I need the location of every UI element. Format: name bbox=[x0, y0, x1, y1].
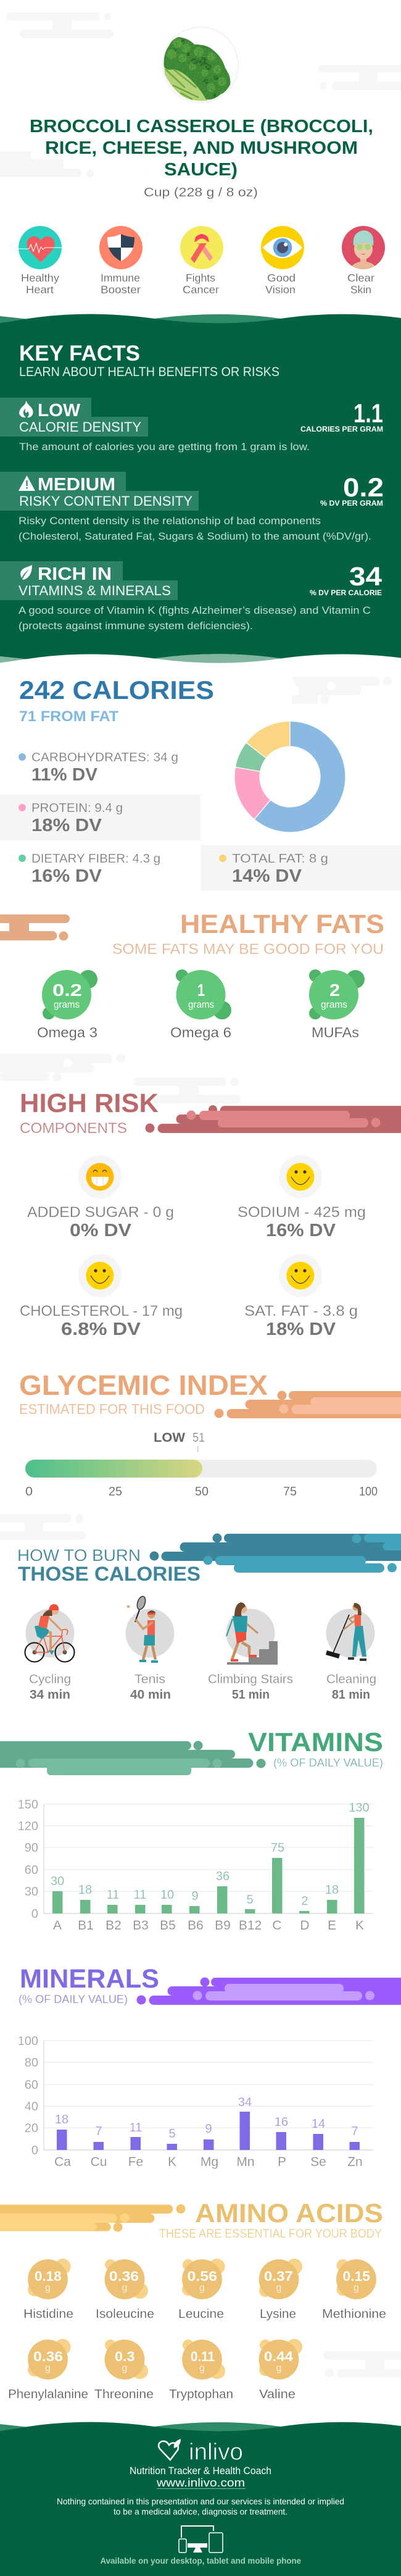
heading: how to burn: HOW TO BURN bbox=[17, 1546, 141, 1565]
fat: mufas: 2 bbox=[329, 981, 340, 1000]
x axis labels: B9 bbox=[215, 1918, 231, 1933]
activity: cleaning: Cleaning bbox=[326, 1673, 376, 1686]
decorative blob bbox=[149, 1534, 401, 1573]
value labels: 10 bbox=[160, 1888, 174, 1902]
decorative blob bbox=[0, 2204, 185, 2231]
decorative blob bbox=[0, 914, 70, 941]
activity: cycling bbox=[25, 1604, 74, 1702]
panel: key facts bbox=[0, 314, 401, 663]
heading: high risk bbox=[20, 1089, 159, 1137]
panel: high risk components bbox=[20, 1089, 401, 1339]
amino: methionine: Methionine bbox=[322, 2307, 386, 2321]
risk: added sugar bbox=[27, 1155, 174, 1240]
y axis labels: 60 bbox=[25, 1863, 38, 1877]
panel: amino acids bbox=[0, 2199, 386, 2401]
serving size: Cup (228 g / 8 oz) bbox=[144, 186, 258, 199]
amino: phenylalanine: Phenylalanine bbox=[8, 2388, 88, 2401]
x axis labels: B12 bbox=[239, 1918, 262, 1933]
x axis labels: P bbox=[278, 2155, 286, 2169]
heading: calories: 242 CALORIES bbox=[19, 675, 214, 705]
panel: calories bbox=[0, 675, 401, 891]
x axis labels: B1 bbox=[78, 1918, 94, 1933]
value labels: 30 bbox=[51, 1875, 64, 1888]
icon: healthy heart bbox=[19, 226, 62, 269]
macro: carbohydrates: 11% DV bbox=[31, 765, 98, 785]
x axis labels: A bbox=[53, 1918, 62, 1933]
heading: vitamins: (% OF DAILY VALUE) bbox=[273, 1756, 383, 1769]
fact: rich in vitamins and minerals: 34 bbox=[349, 562, 382, 592]
x axis labels: Mn bbox=[236, 2155, 255, 2169]
fact: medium risky content density: % DV PER GRAM bbox=[320, 499, 383, 508]
amino: valine bbox=[259, 2339, 302, 2401]
amino: isoleucine bbox=[96, 2259, 154, 2321]
macro: protein: 18% DV bbox=[31, 816, 102, 835]
heading: minerals: (% OF DAILY VALUE) bbox=[19, 1993, 128, 2005]
macro: protein bbox=[0, 795, 200, 840]
donut chart: macronutrients bbox=[234, 721, 345, 832]
fact: rich in vitamins and minerals: VITAMINS & MINERALS bbox=[19, 583, 171, 598]
amino: methionine bbox=[322, 2259, 386, 2321]
fact: rich in vitamins and minerals: RICH IN bbox=[38, 564, 112, 584]
amino: lysine bbox=[259, 2259, 302, 2321]
fact: medium risky content density: Risky Content density is the relationship of bad components bbox=[19, 516, 321, 527]
risk: sodium: 16% DV bbox=[266, 1221, 336, 1240]
macro: dietary fiber bbox=[19, 852, 160, 886]
macro: total fat: 14% DV bbox=[232, 866, 302, 886]
label: good vision: Vision bbox=[265, 283, 296, 296]
x axis labels: Ca bbox=[54, 2155, 71, 2169]
value labels: 7 bbox=[95, 2125, 102, 2138]
fat: omega 3: grams bbox=[54, 1000, 80, 1010]
disclaimer: to be a medical advice, diagnosis or treatment. bbox=[114, 2507, 287, 2517]
fact: low calorie density bbox=[0, 398, 383, 453]
fat: omega 6: grams bbox=[188, 1000, 214, 1010]
macro: carbohydrates bbox=[19, 751, 178, 785]
activity: climbing stairs: 51 min bbox=[232, 1688, 270, 1702]
label: fights cancer: Fights bbox=[186, 272, 215, 284]
macro: total fat bbox=[200, 845, 401, 891]
tagline and website: Nutrition Tracker & Health Coach bbox=[130, 2465, 271, 2477]
amino: methionine: g bbox=[353, 2283, 359, 2293]
value labels: 9 bbox=[205, 2122, 212, 2136]
title bbox=[30, 117, 373, 180]
fact: medium risky content density bbox=[0, 472, 384, 542]
value labels: 9 bbox=[191, 1889, 199, 1903]
fact: medium risky content density: MEDIUM bbox=[38, 475, 115, 495]
gauge scale bbox=[25, 1485, 378, 1499]
heading: amino acids: THESE ARE ESSENTIAL FOR YOUR BODY bbox=[159, 2227, 382, 2241]
y axis labels: 0 bbox=[31, 2144, 38, 2157]
icon: person sweeping bbox=[326, 1603, 366, 1661]
label: clear skin: Skin bbox=[350, 283, 371, 296]
hero food image: broccoli bbox=[163, 27, 238, 102]
gauge scale: 75 bbox=[283, 1485, 297, 1499]
heading: how to burn: THOSE CALORIES bbox=[18, 1563, 200, 1585]
value labels bbox=[55, 2096, 358, 2141]
icon: clear skin face bbox=[342, 226, 385, 269]
title: RICE, CHEESE, AND MUSHROOM bbox=[45, 138, 358, 158]
heading: key facts: KEY FACTS bbox=[19, 341, 140, 366]
x axis labels bbox=[53, 1918, 364, 1933]
icon: warning triangle bbox=[19, 475, 35, 491]
amino: histidine: g bbox=[45, 2283, 51, 2293]
icon: person climbing stairs bbox=[226, 1602, 278, 1665]
value labels: 130 bbox=[349, 1801, 370, 1815]
x axis labels: B6 bbox=[188, 1918, 204, 1933]
gauge scale: 25 bbox=[109, 1485, 122, 1499]
decorative faint blob: behind high risk bbox=[133, 1077, 241, 1103]
fat: omega 3: Omega 3 bbox=[37, 1024, 97, 1040]
disclaimer bbox=[57, 2496, 344, 2517]
fact: medium risky content density: (Cholesterol, Saturated Fat, Sugars & Sodium) to the amount (%DV/gr). bbox=[19, 531, 371, 542]
amino: leucine: Leucine bbox=[178, 2307, 224, 2321]
amino: histidine: Histidine bbox=[23, 2307, 73, 2321]
heading: glycemic index bbox=[19, 1370, 268, 1417]
heading: vitamins: VITAMINS bbox=[248, 1728, 383, 1757]
risk: cholesterol: CHOLESTEROL - 17 mg bbox=[20, 1303, 183, 1319]
amino: threonine bbox=[94, 2340, 154, 2401]
risk: added sugar: 0% DV bbox=[70, 1221, 132, 1240]
decorative blob bbox=[146, 1105, 401, 1133]
icon: leaf bbox=[20, 565, 32, 580]
amino: phenylalanine: g bbox=[45, 2363, 51, 2373]
value labels: 11 bbox=[134, 1888, 146, 1902]
y axis labels: 90 bbox=[25, 1841, 38, 1855]
value labels: 18 bbox=[325, 1883, 339, 1897]
activity: cycling: 34 min bbox=[30, 1688, 70, 1702]
bar chart: vitamins bbox=[18, 1798, 373, 1933]
fat: omega 6: 1 bbox=[197, 981, 205, 1000]
fact: low calorie density: LOW bbox=[38, 401, 81, 420]
label: healthy heart: Healthy bbox=[21, 272, 59, 284]
x axis labels: C bbox=[272, 1918, 282, 1933]
value labels: 16 bbox=[275, 2115, 288, 2129]
activity: cleaning: 81 min bbox=[332, 1688, 370, 1702]
macro: carbohydrates: CARBOHYDRATES: 34 g bbox=[31, 751, 178, 764]
value labels: 2 bbox=[301, 1894, 308, 1908]
amino: histidine bbox=[23, 2259, 73, 2321]
icon: smiling face bbox=[286, 1262, 315, 1289]
activity: tennis: Tenis bbox=[134, 1673, 165, 1686]
label: clear skin: Clear bbox=[347, 272, 374, 284]
fat: omega 6: Omega 6 bbox=[170, 1024, 231, 1040]
icon: immune booster bbox=[99, 226, 143, 269]
amino: lysine: Lysine bbox=[260, 2307, 296, 2321]
heading: high risk: HIGH RISK bbox=[20, 1089, 159, 1118]
value labels: 11 bbox=[130, 2121, 142, 2135]
activity: tennis: 40 min bbox=[130, 1688, 171, 1702]
risk: saturated fat: SAT. FAT - 3.8 g bbox=[244, 1303, 358, 1319]
amino: tryptophan: g bbox=[199, 2363, 205, 2373]
benefits row bbox=[19, 226, 385, 296]
fact: low calorie density: CALORIES PER GRAM bbox=[300, 425, 383, 433]
panel: how to burn those calories bbox=[17, 1534, 401, 1702]
heading: how to burn bbox=[17, 1546, 200, 1585]
logo: inlivo: inlivo bbox=[189, 2439, 243, 2465]
risk: saturated fat: 18% DV bbox=[266, 1319, 336, 1339]
icon: tennis player bbox=[127, 1595, 158, 1663]
heading: minerals: MINERALS bbox=[20, 1964, 159, 1994]
tagline and website bbox=[130, 2465, 271, 2489]
fat: mufas: MUFAs bbox=[312, 1024, 359, 1040]
icon: smiling face bbox=[86, 1262, 114, 1289]
x axis labels: B5 bbox=[160, 1918, 176, 1933]
gauge scale: 100 bbox=[359, 1485, 378, 1499]
fat: omega 3: 0.2 bbox=[52, 981, 82, 1000]
fat: mufas bbox=[309, 969, 365, 1040]
y axis labels: 80 bbox=[25, 2056, 38, 2070]
x axis labels: Zn bbox=[347, 2155, 363, 2169]
fact: rich in vitamins and minerals: % DV PER CALORIE bbox=[310, 588, 382, 597]
panel: glycemic index bbox=[19, 1370, 401, 1499]
heading: calories bbox=[19, 675, 214, 725]
y axis labels: 100 bbox=[18, 2034, 38, 2048]
value labels: 36 bbox=[216, 1870, 229, 1883]
value labels: 34 bbox=[238, 2096, 252, 2109]
value labels: 75 bbox=[271, 1841, 284, 1855]
amino: leucine: g bbox=[199, 2283, 205, 2293]
title: BROCCOLI CASSEROLE (BROCCOLI, bbox=[30, 117, 373, 136]
x axis labels: B3 bbox=[133, 1918, 149, 1933]
decorative blob bbox=[0, 1741, 265, 1775]
amino: lysine: 0.37 bbox=[264, 2269, 293, 2284]
label: healthy heart: Heart bbox=[26, 283, 54, 296]
y axis labels: 30 bbox=[25, 1885, 38, 1899]
y axis labels bbox=[18, 1798, 38, 1921]
fact: medium risky content density: RISKY CONTENT DENSITY bbox=[19, 493, 192, 509]
label: healthy heart bbox=[21, 272, 59, 296]
decorative faint blob: top right bbox=[318, 65, 401, 90]
x axis labels: Se bbox=[310, 2155, 326, 2169]
heading: vitamins bbox=[248, 1728, 383, 1769]
activity: climbing stairs bbox=[208, 1602, 293, 1702]
y axis labels: 150 bbox=[18, 1798, 38, 1812]
y axis labels bbox=[18, 2034, 38, 2157]
amino: tryptophan: Tryptophan bbox=[169, 2388, 233, 2401]
fact: rich in vitamins and minerals: (protects against immune system deficiencies). bbox=[19, 621, 253, 632]
gauge value: low 51: 51 bbox=[192, 1431, 205, 1445]
fact: low calorie density: 1.1 bbox=[353, 399, 383, 429]
heading: healthy fats bbox=[112, 910, 384, 958]
label: immune booster: Immune bbox=[101, 272, 140, 284]
label: clear skin bbox=[347, 272, 374, 296]
x axis labels: D bbox=[300, 1918, 310, 1933]
label: fights cancer: Cancer bbox=[183, 283, 219, 296]
amino: histidine: 0.18 bbox=[35, 2269, 62, 2284]
y axis labels: 60 bbox=[25, 2078, 38, 2092]
label: immune booster bbox=[101, 272, 141, 296]
heading: healthy fats: SOME FATS MAY BE GOOD FOR YOU bbox=[112, 941, 384, 958]
value labels bbox=[51, 1801, 370, 1908]
icon: cyclist bbox=[25, 1604, 74, 1662]
amino: lysine: g bbox=[276, 2283, 281, 2293]
gauge scale: 50 bbox=[195, 1485, 209, 1499]
label: immune booster: Booster bbox=[101, 283, 141, 296]
fat: omega 6 bbox=[170, 969, 231, 1040]
amino: tryptophan: 0.11 bbox=[191, 2349, 215, 2364]
heading: key facts: LEARN ABOUT HEALTH BENEFITS OR RISKS bbox=[19, 365, 279, 379]
icon: devices bbox=[179, 2526, 223, 2553]
gauge bar bbox=[25, 1460, 377, 1478]
decorative faint blob: right of valine bbox=[323, 2351, 401, 2377]
decorative faint blob: before high risk bbox=[0, 1054, 125, 1081]
heading: calories: 71 FROM FAT bbox=[19, 708, 118, 725]
logo: inlivo bbox=[159, 2439, 243, 2465]
y axis labels: 0 bbox=[31, 1907, 38, 1921]
x axis labels: E bbox=[328, 1918, 336, 1933]
value labels: 5 bbox=[246, 1893, 254, 1907]
amino: threonine: g bbox=[122, 2363, 127, 2373]
value labels: 18 bbox=[55, 2113, 68, 2126]
label: good vision bbox=[265, 272, 296, 296]
heading: glycemic index: GLYCEMIC INDEX bbox=[19, 1370, 268, 1401]
amino: phenylalanine: 0.36 bbox=[33, 2349, 63, 2364]
amino: tryptophan bbox=[169, 2340, 233, 2401]
value labels: 14 bbox=[312, 2117, 325, 2131]
panel: footer bbox=[0, 2422, 401, 2576]
fat: omega 3 bbox=[37, 970, 97, 1040]
risk: saturated fat bbox=[244, 1254, 358, 1339]
bars bbox=[52, 1818, 364, 1913]
x axis labels: K bbox=[168, 2155, 176, 2169]
gauge value: low 51: LOW bbox=[154, 1431, 185, 1445]
amino: leucine bbox=[178, 2259, 225, 2321]
heading: amino acids: AMINO ACIDS bbox=[195, 2199, 383, 2228]
amino: valine: g bbox=[276, 2363, 281, 2373]
gauge scale: 0 bbox=[25, 1485, 33, 1499]
decorative blob bbox=[215, 1390, 401, 1418]
fact: low calorie density: CALORIE DENSITY bbox=[19, 419, 141, 435]
disclaimer: Nothing contained in this presentation and our services is intended or implied bbox=[57, 2496, 344, 2506]
macro: total fat: TOTAL FAT: 8 g bbox=[232, 852, 328, 866]
y axis labels: 40 bbox=[25, 2100, 38, 2114]
value labels: 5 bbox=[168, 2127, 176, 2141]
x axis labels: Mg bbox=[200, 2155, 218, 2169]
risk: sodium bbox=[238, 1155, 366, 1240]
label: good vision: Good bbox=[267, 272, 296, 284]
value labels: 7 bbox=[351, 2125, 358, 2138]
activity: cleaning bbox=[326, 1603, 376, 1702]
y axis labels: 120 bbox=[18, 1820, 38, 1833]
heading: glycemic index: ESTIMATED FOR THIS FOOD bbox=[19, 1401, 205, 1417]
decorative faint blob: calories bbox=[292, 677, 392, 704]
macro: dietary fiber: DIETARY FIBER: 4.3 g bbox=[31, 852, 160, 866]
fact: medium risky content density: 0.2 bbox=[343, 473, 384, 503]
icon: good vision eye bbox=[261, 226, 304, 269]
heading: key facts bbox=[19, 341, 279, 379]
fact: rich in vitamins and minerals: A good source of Vitamin K (fights Alzheimer’s disease) and Vitamin C bbox=[19, 605, 371, 616]
availability note: Available on your desktop, tablet and mobile phone bbox=[100, 2556, 301, 2566]
icon: flame bbox=[19, 401, 33, 417]
x axis labels: K bbox=[355, 1918, 364, 1933]
risk: cholesterol: 6.8% DV bbox=[61, 1319, 141, 1339]
x axis labels: Cu bbox=[91, 2155, 107, 2169]
panel: minerals bbox=[18, 1964, 401, 2169]
label: fights cancer bbox=[183, 272, 219, 296]
activity: tennis bbox=[126, 1595, 174, 1702]
amino: threonine: 0.3 bbox=[115, 2349, 134, 2364]
amino: methionine: 0.15 bbox=[343, 2269, 370, 2284]
amino: threonine: Threonine bbox=[94, 2388, 154, 2401]
heading: high risk: COMPONENTS bbox=[20, 1120, 127, 1137]
amino: isoleucine: Isoleucine bbox=[96, 2307, 154, 2321]
risk: cholesterol bbox=[20, 1254, 183, 1339]
decorative faint blob: top left bbox=[6, 12, 114, 38]
fact: rich in vitamins and minerals bbox=[0, 561, 382, 632]
fact: low calorie density: The amount of calories you are getting from 1 gram is low. bbox=[19, 441, 310, 453]
x axis labels: Fe bbox=[128, 2155, 143, 2169]
macro: protein: PROTEIN: 9.4 g bbox=[31, 801, 123, 815]
activity: cycling: Cycling bbox=[29, 1673, 71, 1686]
icon: smiling face bbox=[286, 1163, 315, 1190]
panel: healthy fats bbox=[0, 910, 384, 1040]
gauge value: low 51 bbox=[154, 1431, 205, 1452]
heading: amino acids bbox=[159, 2199, 383, 2241]
value labels: 11 bbox=[107, 1888, 119, 1902]
x axis labels: B2 bbox=[105, 1918, 122, 1933]
tagline and website: www.inlivo.com bbox=[156, 2477, 245, 2489]
amino: valine: Valine bbox=[259, 2388, 296, 2401]
amino: isoleucine: g bbox=[122, 2283, 127, 2293]
icon: grinning face bbox=[86, 1163, 114, 1190]
title: SAUCE) bbox=[164, 160, 238, 180]
amino: valine: 0.44 bbox=[264, 2349, 294, 2364]
heading: healthy fats: HEALTHY FATS bbox=[180, 910, 384, 939]
risk: added sugar: ADDED SUGAR - 0 g bbox=[27, 1204, 174, 1221]
activity: climbing stairs: Climbing Stairs bbox=[208, 1673, 293, 1686]
bar chart: minerals bbox=[18, 2034, 373, 2169]
icon: fights cancer ribbon bbox=[180, 226, 223, 269]
decorative faint blob: left of title bbox=[0, 151, 94, 178]
x axis labels bbox=[54, 2155, 363, 2169]
decorative blob bbox=[137, 1977, 401, 2005]
y axis labels: 20 bbox=[25, 2122, 38, 2135]
value labels: 18 bbox=[78, 1883, 92, 1897]
decorative faint blob: before burn section bbox=[0, 1514, 86, 1540]
macro: dietary fiber: 16% DV bbox=[31, 866, 102, 886]
amino: leucine: 0.56 bbox=[188, 2269, 217, 2284]
bars bbox=[57, 2112, 360, 2150]
panel: vitamins bbox=[0, 1728, 383, 1933]
amino: phenylalanine bbox=[8, 2339, 88, 2401]
fat: mufas: grams bbox=[321, 1000, 347, 1010]
amino: isoleucine: 0.36 bbox=[109, 2269, 139, 2284]
risk: sodium: SODIUM - 425 mg bbox=[238, 1204, 366, 1221]
